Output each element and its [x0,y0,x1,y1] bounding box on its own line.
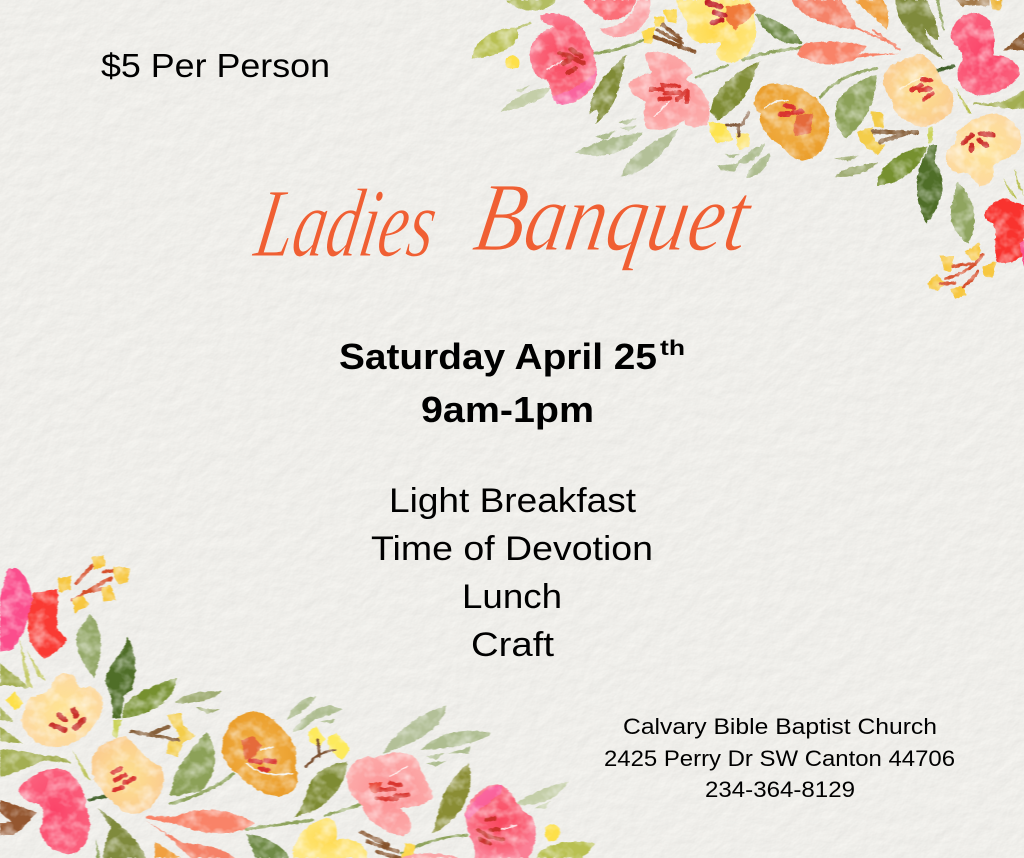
flower: pale cream left [21,673,103,747]
twig and yellow buds: bottom left [132,713,350,767]
flower: magenta red lower left [0,769,90,854]
flower: orange lower left [222,712,298,797]
agenda list: Light Breakfast [389,482,637,520]
floral corner: top right [472,0,1024,299]
title: Ladies Banquet: Ladies [247,170,445,278]
flower: rose pink [629,52,710,130]
flower: peach left [92,737,164,814]
flower: magenta red [951,0,1024,95]
flower: red right edge [984,198,1024,268]
flower: yellow top [505,0,756,69]
title: Ladies Banquet [247,164,760,278]
leaves and stems: bottom left [0,613,595,858]
yellow twigs and stamens: top right [709,112,996,299]
event date and time [339,336,685,430]
church contact details: 2425 Perry Dr SW Canton 44706 [604,746,955,771]
event date and time: Saturday April 25 [339,336,657,377]
title: Ladies Banquet: Banquet [467,164,760,272]
flower: pale cream [928,113,1021,186]
flower: yellow lower [293,818,459,858]
church contact details: 234-364-8129 [705,777,855,802]
flower: cropped pink top [583,0,650,37]
agenda list: Craft [471,626,555,664]
salmon sprays: top right [792,0,899,64]
flower: rose pink lower [346,753,432,836]
stamens: bottom left [57,555,130,613]
event date and time: th [660,337,685,360]
flower: pink red lower [465,784,536,858]
church contact details: Calvary Bible Baptist Church [623,714,937,739]
flower: peach [883,54,953,127]
agenda list: Lunch [462,578,562,616]
agenda list [371,482,653,664]
event date and time: 9am-1pm [421,389,594,430]
floral corner: bottom left [0,555,595,858]
church contact details [604,714,955,802]
flower: orange [754,83,830,161]
flower: top pink red [530,13,597,105]
flowers: red and magenta left edge [0,568,67,658]
price note: $5 Per Person [101,47,330,84]
agenda list: Time of Devotion [371,530,653,568]
salmon sprays: bottom left [145,810,254,858]
leaves and stems: top right [472,0,1024,243]
